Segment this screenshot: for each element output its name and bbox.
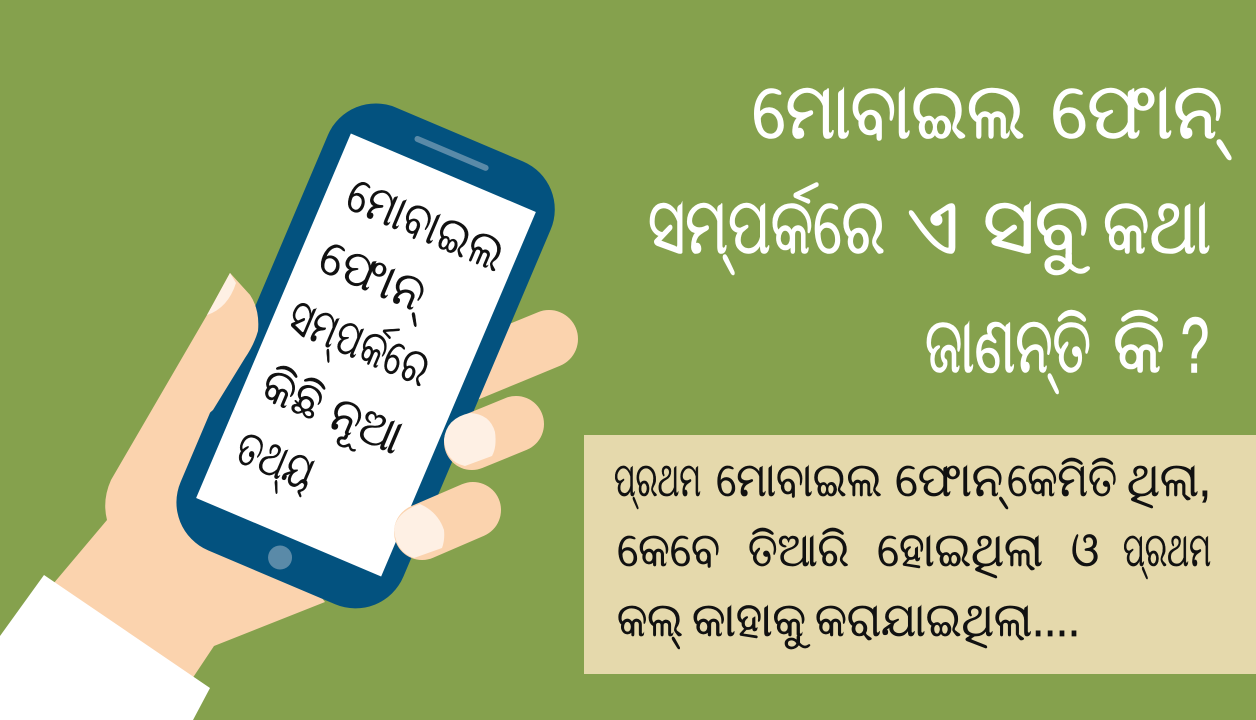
finger: index <box>457 339 549 377</box>
description text: ପ୍ରଥମ <box>614 454 701 509</box>
description text: କାହାକୁ <box>692 594 811 649</box>
title: ମୋବାଇଲ <box>752 67 1025 155</box>
phone body <box>160 87 571 625</box>
title: କି <box>1113 301 1165 389</box>
finger: middle <box>444 413 516 466</box>
title: ଏ <box>907 182 959 270</box>
icon: middle finger nail <box>444 413 496 466</box>
phone home button <box>264 542 296 573</box>
phone screen text <box>224 163 513 539</box>
description text: ଓ <box>1071 524 1099 577</box>
description text: ଥିଲା, <box>1127 454 1211 508</box>
title: କଥା <box>1103 182 1211 270</box>
title: ସବୁ <box>983 182 1090 274</box>
title: ? <box>1181 301 1209 389</box>
description text: ହୋଇଥିଲା <box>877 524 1043 578</box>
description text: କଲ୍ <box>617 594 683 649</box>
phone screen text: ମୋବାଇଲ <box>339 166 513 282</box>
panel: description <box>584 435 1256 674</box>
illustration: hand holding phone <box>0 87 571 720</box>
phone <box>160 87 571 625</box>
title <box>648 67 1231 393</box>
icon: ring finger nail <box>394 504 444 558</box>
description text: କରାଯାଇଥିଲା.... <box>815 594 1080 648</box>
hand: palm and thumb <box>48 273 325 682</box>
phone screen text: ଫୋନ୍ <box>310 228 439 327</box>
title: ଜାଣନ୍ତି <box>925 301 1091 393</box>
description text <box>614 454 1211 649</box>
title: ସମ୍ପର୍କରେ <box>648 182 885 274</box>
phone screen <box>196 133 536 577</box>
phone screen text: ତଥ୍ୟ <box>227 419 324 504</box>
icon: thumb nail highlight <box>207 273 236 315</box>
description text: ମୋବାଇଲ <box>716 454 882 507</box>
phone speaker <box>414 135 490 172</box>
description text: ଫୋନ୍ <box>895 454 1008 509</box>
description text: ତିଆରି <box>748 524 849 577</box>
phone screen text: କିଛି ନୂଆ <box>252 356 412 468</box>
description text: କେବେ <box>617 524 720 577</box>
title: ଫୋନ୍ <box>1051 67 1231 159</box>
shirt sleeve <box>0 575 210 720</box>
finger: ring <box>394 504 473 558</box>
panel background <box>584 435 1256 674</box>
hand: thumb base overlapping phone edge <box>190 273 258 430</box>
phone screen text: ସମ୍ପର୍କରେ <box>279 288 438 400</box>
description text: କେମିତି <box>1007 454 1117 507</box>
